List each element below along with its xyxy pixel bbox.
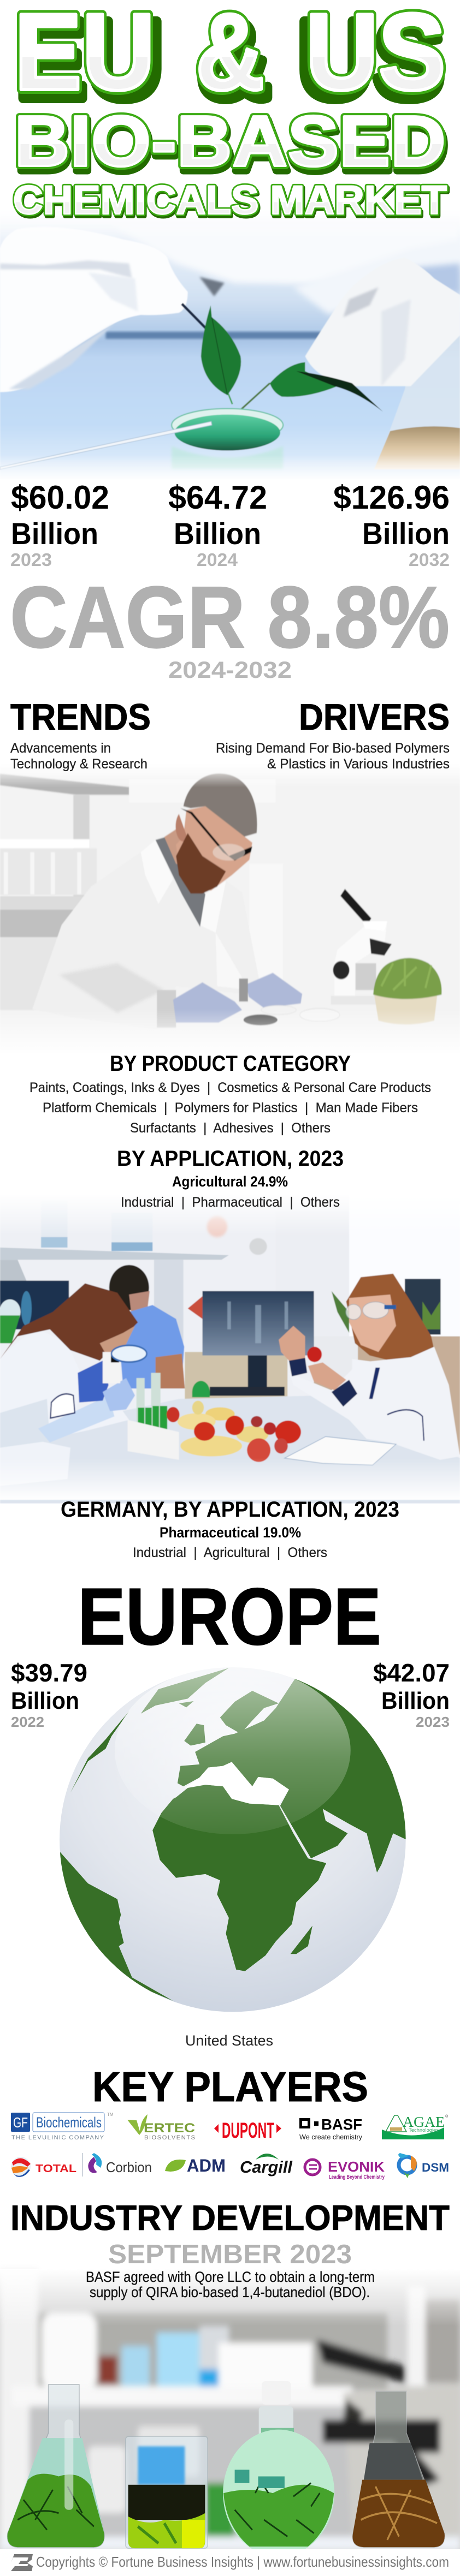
logo: Total [11, 2157, 76, 2177]
Europe heading and values: 2022 [11, 1714, 44, 1730]
title: EU & US Bio-Based Chemicals Market: CHEMICALS MARKET [13, 177, 447, 223]
logo: ADM: ADM [187, 2156, 226, 2175]
trends block: Advancements in [10, 741, 111, 756]
by product category: BY PRODUCT CATEGORY [110, 1052, 351, 1076]
photo: gloved hands with leaf and petri dish [0, 204, 460, 482]
section text: market stats: $64.72 [168, 479, 267, 516]
by application: Industrial | Pharmaceutical | Others [121, 1195, 340, 1210]
Germany by application: Industrial | Agricultural | Others [133, 1545, 327, 1560]
section text: market stats: Billion [362, 516, 450, 551]
logo: Evonik [305, 2158, 385, 2180]
logo: AGAE Technologies: AGAE [403, 2114, 445, 2130]
title: EU & US Bio-Based Chemicals Market: CHEMICALS MARKET [13, 177, 447, 223]
industry development: BASF agreed with Qore LLC to obtain a long-term [86, 2269, 375, 2285]
footer: copyright bar [0, 2549, 460, 2576]
Europe heading and values: EUROPE [78, 1572, 381, 1662]
logo: GF Biochemicals: Biochemicals [36, 2114, 102, 2131]
title: EU & US Bio-Based Chemicals Market: US [298, 0, 444, 122]
trends block: TRENDS [10, 696, 151, 738]
logo: Corbion [82, 2153, 152, 2177]
United States label: United States [185, 2032, 273, 2049]
section text: market stats: $60.02 [11, 479, 109, 516]
section text: market stats: 2032 [409, 550, 450, 570]
logo: BASF [299, 2116, 362, 2141]
logo: Evonik: Leading Beyond Chemistry [329, 2174, 385, 2180]
photo: scientist with microscope and plant [0, 764, 460, 1055]
trends block [10, 696, 151, 772]
logo: Corbion: Corbion [106, 2159, 152, 2175]
title: EU & US Bio-Based Chemicals Market [13, 0, 448, 225]
drivers block: & Plastics in Various Industries [267, 756, 450, 772]
industry development: INDUSTRY DEVELOPMENT [10, 2198, 450, 2238]
logo: GF Biochemicals: TM [107, 2112, 114, 2117]
logo: Vertec Biosolvents [127, 2114, 195, 2141]
Europe heading and values: Billion [381, 1687, 450, 1714]
logo: AGAE Technologies: ® [445, 2114, 449, 2119]
Germany by application: Pharmaceutical 19.0% [160, 1524, 301, 1541]
by application: Agricultural 24.9% [172, 1173, 288, 1190]
section text: market stats: $126.96 [333, 479, 450, 516]
by product category: Platform Chemicals | Polymers for Plastics | Man Made Fibers [43, 1100, 418, 1116]
section text: market stats: Billion [11, 516, 98, 551]
industry development: supply of QIRA bio-based 1,4-butanediol (BDO). [90, 2284, 370, 2300]
by application [117, 1147, 344, 1210]
section text: market stats: 2024 [197, 550, 238, 570]
title: EU & US Bio-Based Chemicals Market: BIO-BASED [14, 101, 446, 181]
section text: market stats: Billion [174, 516, 261, 551]
globe [58, 1666, 408, 2012]
icon: Fortune Business Insights mark [11, 2554, 33, 2571]
photo: two researchers examining produce [0, 1194, 460, 1504]
logo: Total: TOTAL [36, 2163, 76, 2175]
Europe heading and values: $39.79 [11, 1659, 87, 1687]
drivers block: Rising Demand For Bio-based Polymers [216, 741, 450, 756]
Europe heading and values: 2023 [416, 1714, 450, 1730]
logo: DSM: DSM [422, 2161, 449, 2174]
logo: BASF: We create chemistry [299, 2133, 362, 2141]
by product category: Paints, Coatings, Inks & Dyes | Cosmetics & Personal Care Products [30, 1080, 431, 1095]
logo: GF Biochemicals [11, 2112, 114, 2141]
logo: Vertec Biosolvents: ERTEC [144, 2121, 195, 2136]
logo: DuPont: DUPONT [222, 2119, 274, 2143]
CAGR headline: 2024-2032 [168, 657, 292, 683]
Germany by application [61, 1498, 399, 1560]
logo: Cargill: Cargill [240, 2157, 293, 2177]
drivers block: DRIVERS [299, 696, 450, 738]
title: EU & US Bio-Based Chemicals Market: EU [16, 0, 163, 122]
Europe heading and values [11, 1572, 450, 1730]
by product category: Surfactants | Adhesives | Others [130, 1120, 331, 1136]
logo: Vertec Biosolvents: BIOSOLVENTS [144, 2134, 195, 2141]
logo: DSM [398, 2153, 449, 2178]
logo: ADM [165, 2156, 226, 2175]
Germany by application: GERMANY, BY APPLICATION, 2023 [61, 1498, 399, 1522]
drivers block [216, 696, 450, 772]
by product category [30, 1052, 431, 1136]
industry development: SEPTEMBER 2023 [108, 2240, 352, 2269]
photo: flasks with green algae [0, 2269, 460, 2556]
logo: BASF: BASF [321, 2116, 362, 2133]
logo: AGAE Technologies [382, 2114, 449, 2139]
Key players heading: KEY PLAYERS [92, 2064, 368, 2110]
section text: market stats [10, 479, 450, 570]
logo: GF Biochemicals: GF [13, 2114, 28, 2131]
section text: market stats: 2023 [10, 550, 52, 570]
title: EU & US Bio-Based Chemicals Market: BIO-BASED [16, 104, 447, 187]
title: EU & US Bio-Based Chemicals Market: CHEMICALS MARKET [14, 179, 448, 225]
title: EU & US Bio-Based Chemicals Market: BIO-BASED [14, 101, 446, 181]
Europe heading and values: $42.07 [373, 1659, 450, 1687]
trends block: Technology & Research [10, 756, 148, 772]
by application: BY APPLICATION, 2023 [117, 1147, 344, 1171]
title: EU & US Bio-Based Chemicals Market: & [197, 0, 271, 122]
logo: DuPont [214, 2119, 281, 2143]
Europe heading and values: Billion [11, 1687, 79, 1714]
logo: AGAE Technologies: Technologies [409, 2127, 439, 2133]
industry development [10, 2198, 450, 2300]
logo: Evonik: EVONIK [328, 2158, 385, 2175]
logo: GF Biochemicals: THE LEVULINIC COMPANY [11, 2134, 104, 2141]
